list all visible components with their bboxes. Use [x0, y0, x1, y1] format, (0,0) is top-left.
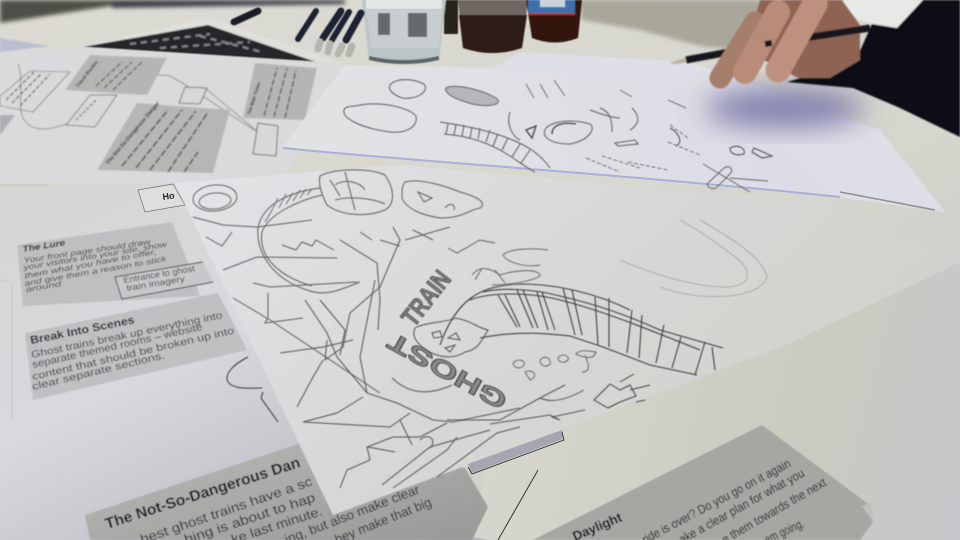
break body: content that should be broken up into — [31, 326, 236, 383]
lure body: them what you have to offer, — [24, 247, 157, 280]
train head — [319, 170, 392, 215]
tongue shape and lower branch — [447, 385, 585, 424]
tiny right sketches — [670, 128, 772, 158]
box: The Best Ticket — [243, 63, 317, 120]
cola bottle — [526, 0, 582, 42]
blue paper edge left — [0, 38, 50, 52]
box: grey top — [65, 55, 167, 95]
flow curve and bracket — [227, 357, 278, 422]
fold corner — [862, 503, 873, 522]
black printed area — [82, 25, 316, 62]
heading box Ho — [138, 184, 185, 212]
pencil — [670, 28, 870, 64]
skull top — [402, 181, 483, 218]
train head — [344, 104, 416, 132]
panel: The Lure — [17, 222, 200, 306]
blue paper edge — [283, 148, 840, 197]
cross drawn — [594, 374, 650, 408]
paper shadow sliver — [468, 430, 563, 473]
break heading: Break Into Scenes — [29, 314, 136, 347]
top-left wireframe paper — [0, 38, 345, 184]
dark sleeve — [787, 0, 960, 137]
box: white text note — [0, 71, 70, 112]
notes — [526, 80, 686, 108]
danger heading: The Not-So-Dangerous Dan — [103, 454, 302, 533]
callout: Entrance to ghost train imagery: train imagery — [126, 273, 186, 293]
palm — [745, 0, 860, 78]
lure body — [22, 237, 169, 294]
panel: Break Into Scenes — [25, 293, 247, 400]
ring sketch — [192, 183, 238, 213]
bottom-left paper — [0, 183, 490, 540]
box: small outline lower — [253, 123, 278, 156]
lure body: around — [25, 279, 63, 294]
shadow edge of under paper — [840, 192, 935, 210]
bottles and glass — [362, 0, 582, 64]
break body — [30, 310, 236, 393]
word GHOST: GHOST — [383, 327, 512, 414]
break body: Ghost trains break up everything into — [30, 310, 224, 361]
panel: Daylight — [533, 425, 873, 540]
hand shadow — [705, 88, 865, 128]
upper sketch paper — [282, 65, 840, 197]
central trees — [280, 227, 520, 488]
box: outline entrance — [66, 95, 117, 127]
props — [282, 227, 495, 253]
pencil between fingers — [765, 43, 772, 44]
dark bottle behind glass — [444, 0, 458, 34]
hand with pencil — [670, 0, 960, 137]
pens — [234, 11, 361, 54]
callout: Entrance to ghost train imagery: Entrance to ghost — [123, 263, 196, 285]
big arc — [258, 188, 360, 293]
break body: clear separate sections. — [31, 350, 166, 393]
bottom-right paper and table — [473, 262, 960, 540]
box: grey top: Travel Routes — [75, 60, 100, 89]
top shape — [390, 80, 425, 98]
branches left — [193, 217, 380, 393]
brown drink cup — [458, 0, 528, 53]
upper sketches — [344, 80, 772, 192]
ride track sketch — [192, 170, 520, 488]
background wall — [0, 0, 760, 52]
rocks and stones — [472, 249, 596, 380]
Ghost Train hand lettering — [383, 264, 512, 414]
track sleepers — [440, 284, 723, 375]
cross on paper — [703, 164, 768, 192]
paper under upper sketch — [490, 52, 945, 212]
heading box Ho: Ho — [162, 190, 176, 202]
box: small outline — [179, 87, 207, 104]
panel: The Not-So-Dangerous Danger — [85, 430, 488, 540]
white speckle text rows — [130, 34, 262, 52]
lure body: and give them a reason to stick — [24, 254, 169, 288]
word TRAIN: TRAIN — [395, 264, 457, 332]
far right oval track — [620, 220, 767, 297]
fingers — [720, 4, 815, 78]
water glass — [362, 0, 446, 64]
skull sketch — [414, 318, 488, 357]
lure body: Your front page should draw — [23, 237, 152, 265]
box: The Not-So-Dangerous Danger — [97, 100, 230, 173]
callout: Entrance to ghost train imagery — [115, 262, 213, 299]
connector curves — [18, 64, 258, 132]
box: The Best Ticket: The Main Ticket — [246, 81, 262, 115]
lure body: your visitors into your site, show — [22, 240, 168, 272]
lure heading: The Lure — [22, 237, 66, 254]
break body: separate themed rooms – website — [31, 322, 204, 371]
box: small grey left — [0, 115, 15, 135]
left paper stray edge — [0, 185, 50, 420]
middle sketch — [509, 110, 620, 144]
danger body — [138, 474, 434, 540]
dark sketch sheet — [75, 18, 345, 70]
box: The Not-So-Dangerous Danger: The Not-So-Dangerous Danger — [105, 100, 162, 166]
track rails — [440, 122, 550, 172]
connector line bottom — [498, 470, 538, 540]
white sheet edge — [75, 18, 345, 70]
main ghost train sketch paper — [175, 165, 960, 515]
white cuff — [840, 0, 923, 30]
